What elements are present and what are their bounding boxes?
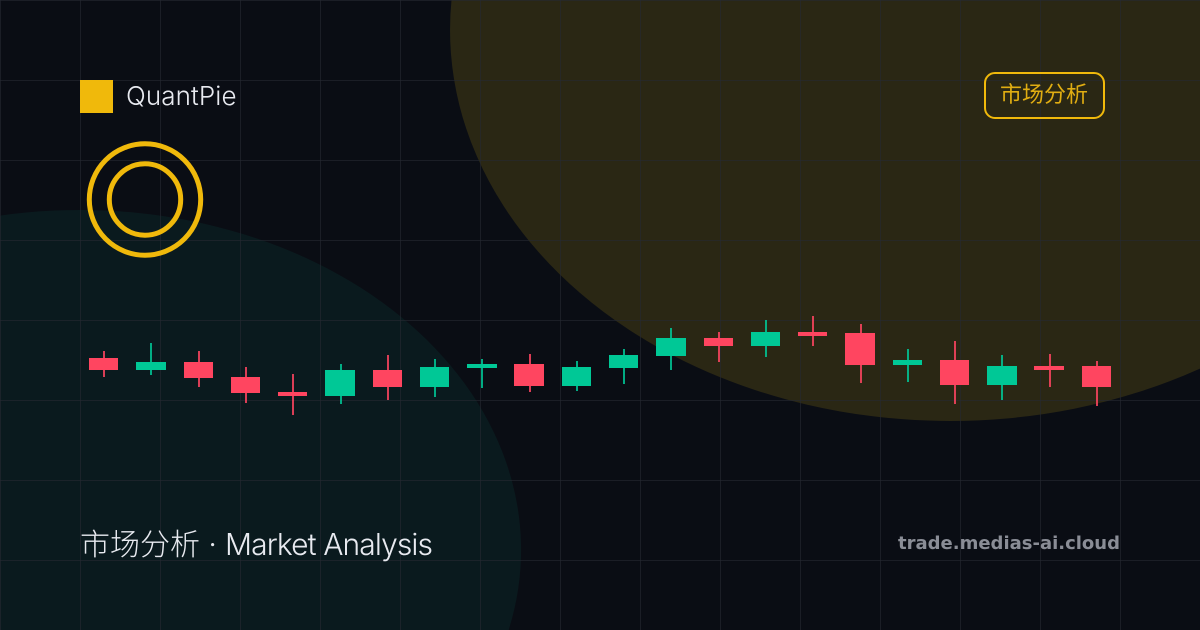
background blob: gold xyxy=(450,0,1200,421)
url: trade.medias-ai.cloud xyxy=(898,533,1120,554)
icon: concentric rings xyxy=(89,144,201,255)
badge: market analysis xyxy=(985,73,1104,118)
badge: market analysis: 市场分析 xyxy=(1000,82,1088,108)
logo wordmark: QuantPie xyxy=(126,81,237,112)
title: Market Analysis xyxy=(225,527,432,563)
title: 市场分析 · xyxy=(80,527,217,563)
logo mark xyxy=(80,80,113,113)
background blob: teal xyxy=(0,210,521,630)
candlestick chart xyxy=(89,316,1111,415)
